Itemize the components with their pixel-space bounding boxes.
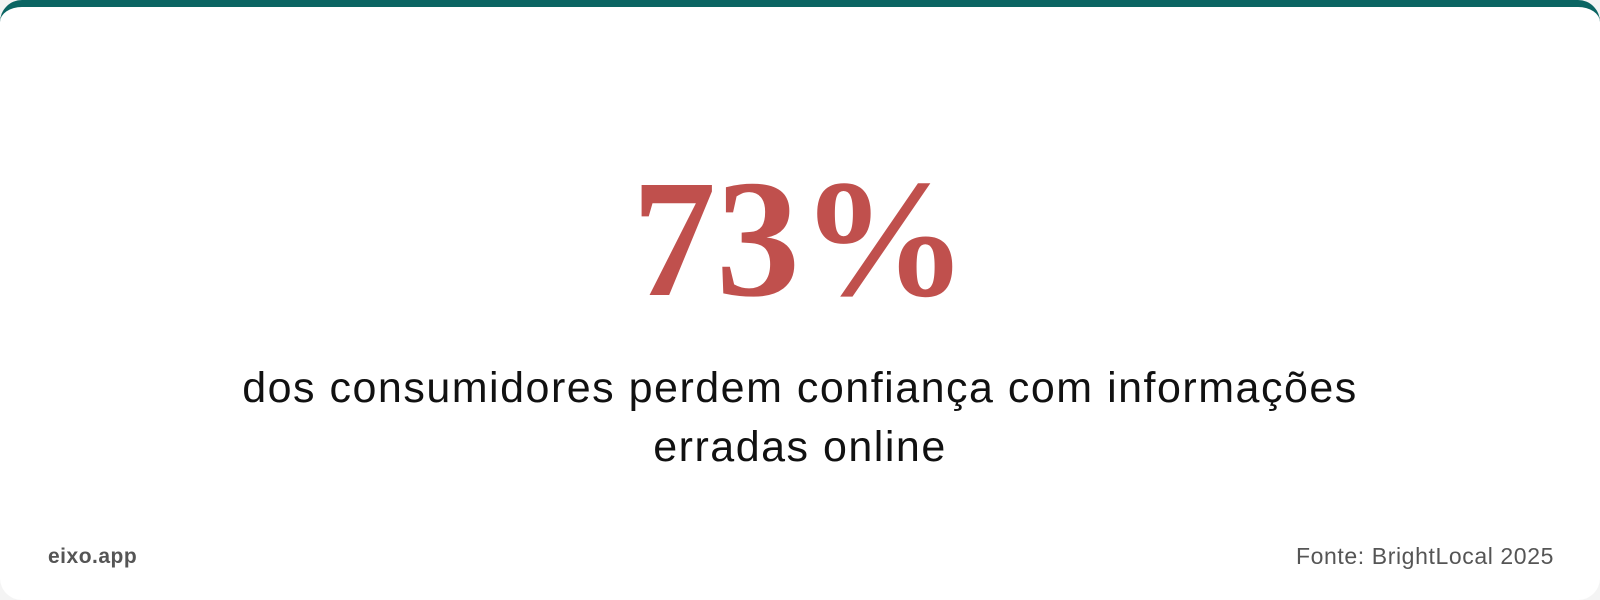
big statistic: 73%: [632, 146, 968, 332]
description text: dos consumidores perdem confiança com informações: [242, 364, 1358, 412]
description text: [242, 364, 1358, 471]
description text: erradas online: [653, 423, 947, 471]
brand: eixo.app: [48, 545, 137, 568]
source: Fonte: BrightLocal 2025: [1296, 543, 1554, 569]
